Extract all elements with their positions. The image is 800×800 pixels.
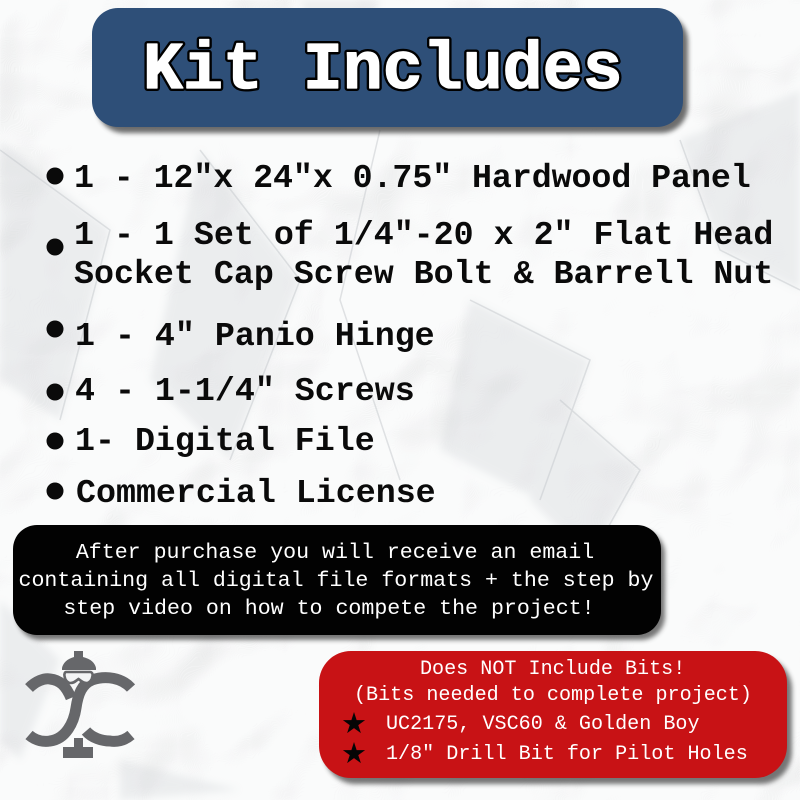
bit list with stars: ★ <box>341 706 367 740</box>
icon: hard hat <box>62 651 96 670</box>
icon: goggles <box>64 672 93 683</box>
title banner <box>92 8 688 133</box>
item: hinge: 1 - 4" Panio Hinge <box>75 317 435 355</box>
black notice panel <box>13 525 665 640</box>
icon: S curve joining both Cs <box>29 678 131 741</box>
red warning panel <box>319 651 792 784</box>
icon: base <box>63 738 93 758</box>
warning heading: Does NOT Include Bits! <box>420 658 685 681</box>
item: screw bolt and barrel nut <box>46 216 773 293</box>
item: hardwood panel: 1 - 12"x 24"x 0.75" Hardwood Panel <box>74 159 751 197</box>
bit list with stars <box>341 706 748 770</box>
logo: hard hat and double C <box>29 651 131 758</box>
icon: left arc <box>29 679 71 698</box>
notice text: containing all digital file formats + the step by <box>19 569 654 593</box>
bit list with stars: ★ <box>341 736 367 770</box>
icon: right lower arc <box>86 731 131 741</box>
item: screw bolt and barrel nut: Socket Cap Screw Bolt & Barrell Nut <box>74 255 773 293</box>
item: digital file: 1- Digital File <box>75 422 375 460</box>
bit list with stars: UC2175, VSC60 & Golden Boy <box>386 713 700 736</box>
title text: Kit Includes <box>143 33 623 108</box>
item: screw bolt and barrel nut: 1 - 1 Set of 1/4"-20 x 2" Flat Head <box>74 216 773 254</box>
notice text: step video on how to compete the project! <box>63 597 595 621</box>
red warning panel: (Bits needed to complete project) <box>354 684 752 707</box>
item: screws: 4 - 1-1/4" Screws <box>75 372 415 410</box>
bit list with stars: 1/8" Drill Bit for Pilot Holes <box>386 743 748 766</box>
notice text: After purchase you will receive an email <box>76 541 594 565</box>
notice text <box>19 541 654 621</box>
kit contents list <box>46 159 773 512</box>
title text: Kit Includes <box>143 33 623 108</box>
item: commercial license: Commercial License <box>76 474 436 512</box>
